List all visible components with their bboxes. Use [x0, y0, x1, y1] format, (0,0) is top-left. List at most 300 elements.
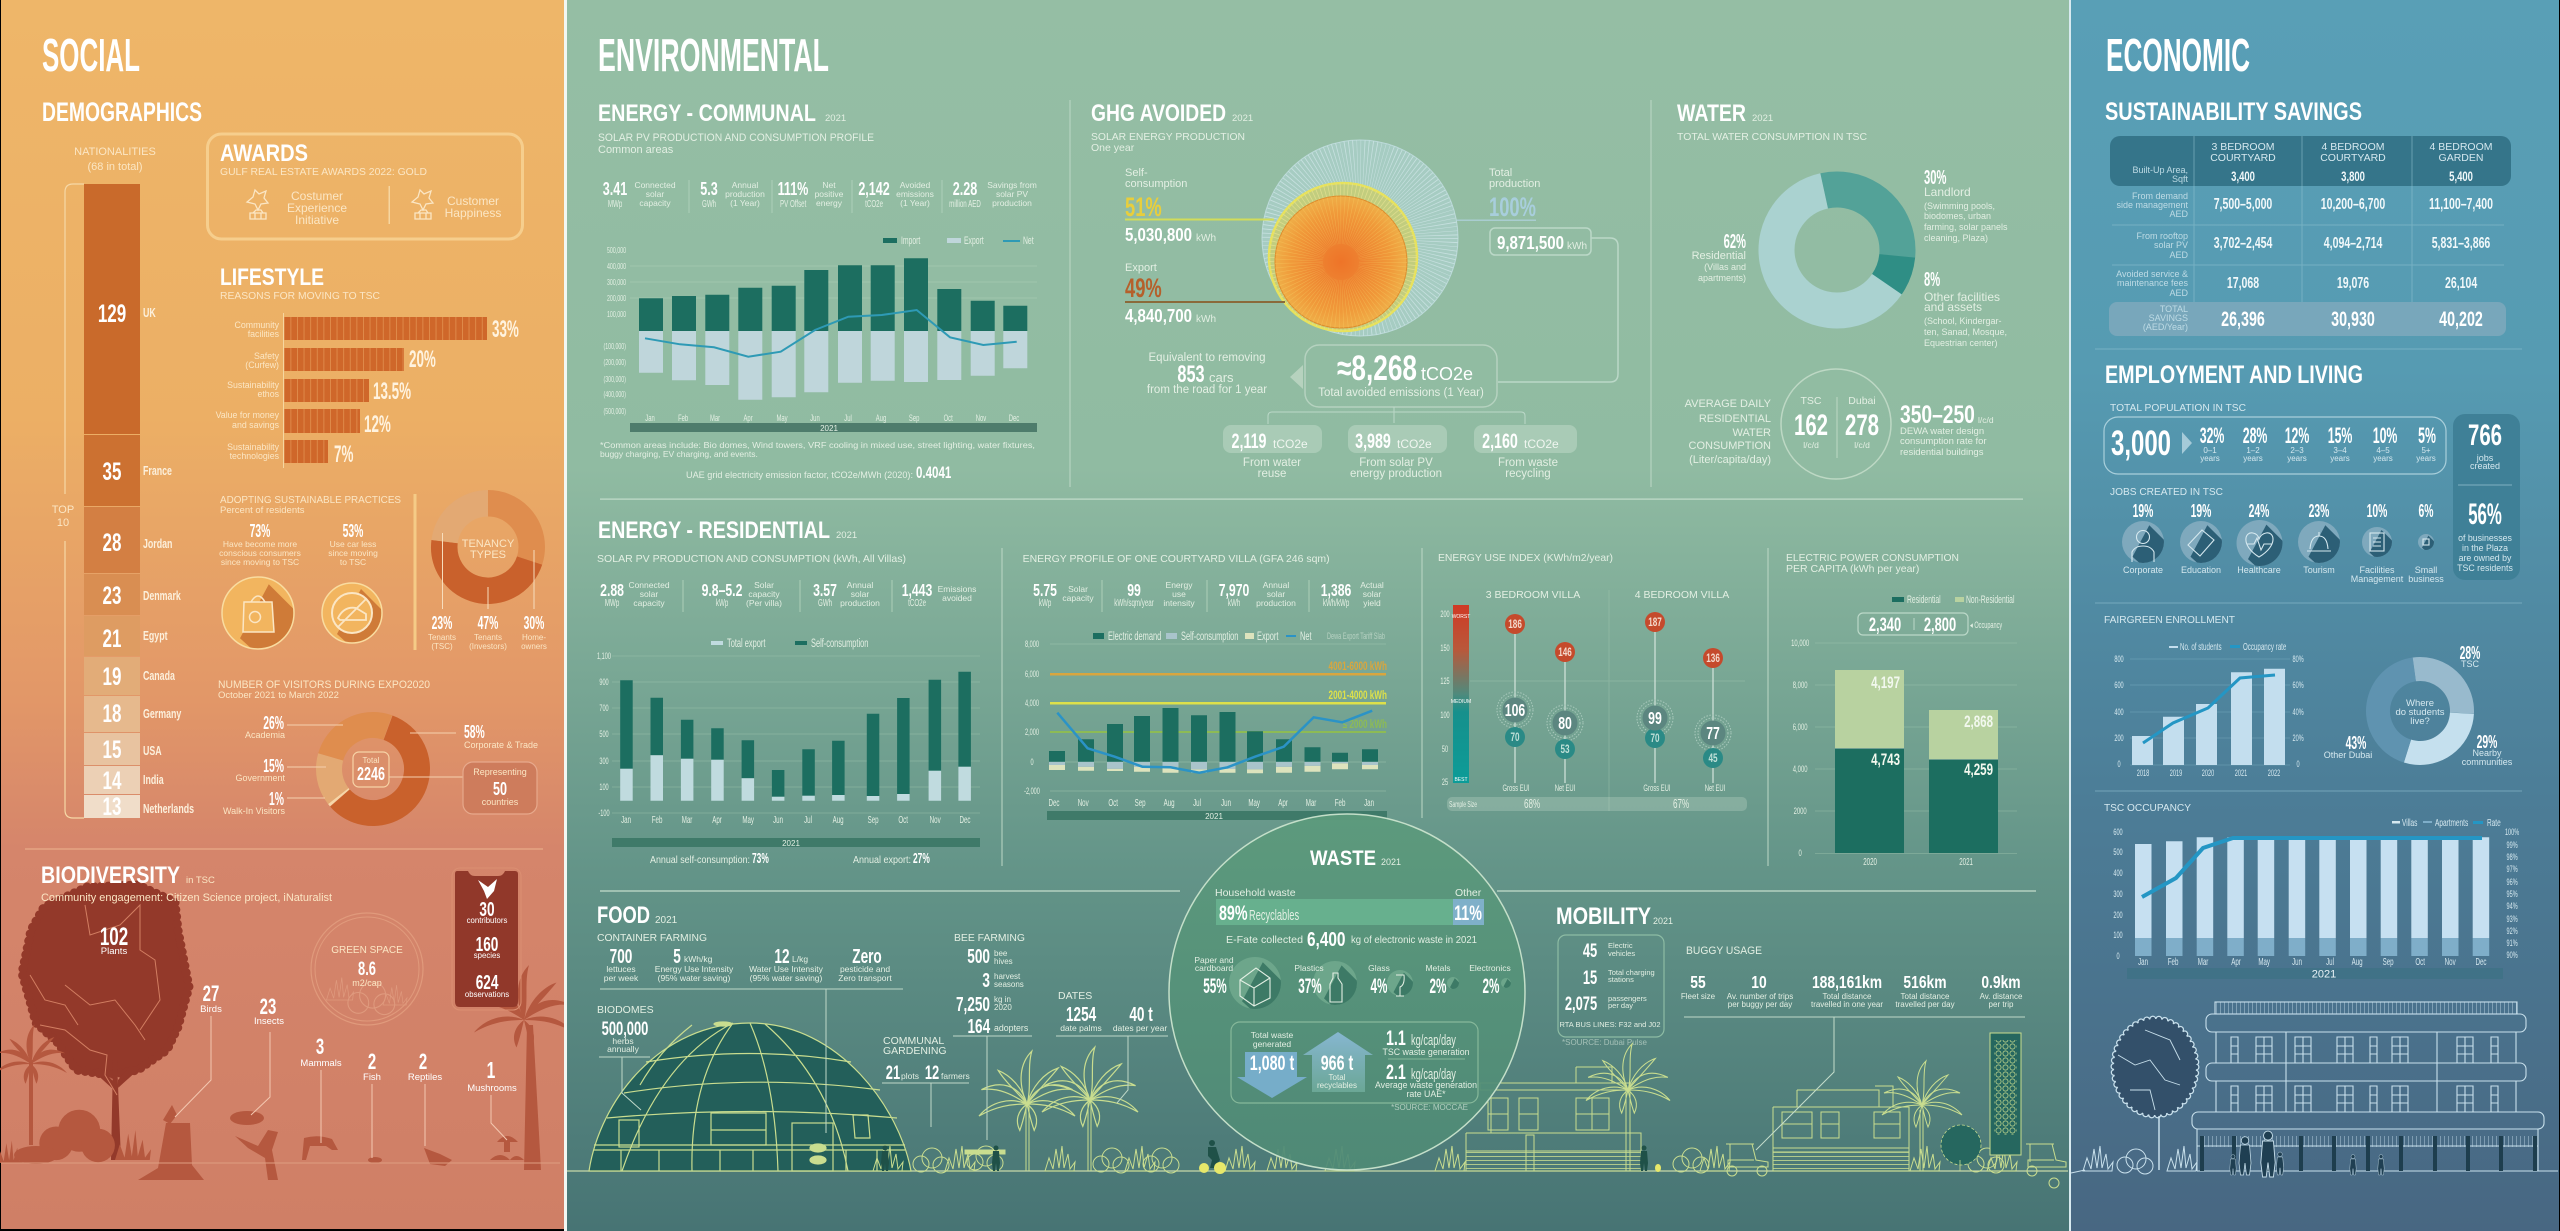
section: food: 2021	[655, 915, 678, 926]
panel: social	[0, 29, 574, 1180]
stats row: Avoided	[900, 180, 931, 190]
table: sustainability savings: 40,202	[2439, 307, 2483, 331]
donut chart: visitors during expo: countries	[482, 797, 519, 807]
species counts with leader lines: 2	[419, 1049, 427, 1074]
section: ghg avoided: Total	[1489, 167, 1512, 179]
buggy usage stats: travelled per day	[1895, 1000, 1955, 1009]
combo chart: villa energy: 2,000	[1025, 727, 1039, 737]
section: water: (School, Kindergar-	[1924, 316, 2002, 326]
arrow up	[1303, 1032, 1373, 1092]
combo chart: tsc occupancy: 200	[2113, 910, 2123, 920]
bar chart: communal import and export: Nov	[976, 413, 986, 423]
bar chart: communal import and export: Sep	[909, 413, 920, 423]
callout: total avoided emissions: Total avoided emissions (1 Year)	[1318, 387, 1484, 399]
card: jobs and businesses: TSC residents	[2457, 563, 2513, 573]
container farming stats: Water Use Intensity	[749, 964, 824, 974]
buggy usage stats: per trip	[1989, 1000, 2014, 1009]
combo chart: villa energy: Net	[1300, 630, 1312, 644]
combo chart: fairgreen enrollment: 2020	[2202, 768, 2214, 778]
block: adopting sustainable practices	[219, 494, 401, 674]
section: water: farming, solar panels	[1924, 222, 2008, 232]
bar chart: reasons for moving: Community	[235, 320, 280, 330]
heading: tsc occupancy: TSC OCCUPANCY	[2104, 802, 2191, 814]
panel: waste circle: E-Fate collected	[1226, 934, 1303, 946]
stats row: GWh	[702, 197, 716, 209]
chart: nationalities column: 10	[57, 517, 69, 529]
combo chart: villa energy: 6,000	[1025, 669, 1039, 679]
combo chart: villa energy: Mar	[1306, 796, 1317, 808]
callout: green space: m2/cap	[352, 978, 382, 988]
bar chart: communal import and export: 100,000	[607, 311, 626, 319]
chips: emissions sources: From solar PV	[1359, 457, 1433, 469]
table: sustainability savings: 3,400	[2231, 168, 2255, 185]
heading: courtyard villa: ENERGY PROFILE OF ONE COURTYARD VILLA (GFA 246 sqm)	[1023, 553, 1330, 565]
chart: energy use index: 70	[1511, 732, 1520, 745]
chart: energy use index: 25	[1442, 777, 1448, 787]
stats row villa: Energy	[1166, 580, 1193, 590]
bee farming stats: seasons	[994, 980, 1024, 989]
table: sustainability savings: (AED/Year)	[2143, 322, 2188, 332]
icon: buggy two	[2026, 1144, 2066, 1188]
stats row: Annual	[847, 580, 873, 590]
heading: lifestyle: REASONS FOR MOVING TO TSC	[220, 290, 380, 302]
table: sustainability savings: Avoided service &	[2116, 269, 2188, 279]
bee farming stats: hives	[994, 957, 1013, 966]
card: jobs and businesses	[2453, 414, 2520, 580]
combo chart: tsc occupancy: 300	[2113, 889, 2123, 899]
chart: electric power per capita: 4,743	[1871, 751, 1900, 770]
chart: energy use index: 77	[1706, 724, 1720, 744]
total production box	[1490, 228, 1591, 255]
chart: energy use index: 3 BEDROOM VILLA	[1486, 589, 1580, 601]
chart: electric power per capita: 4,259	[1964, 761, 1993, 780]
card: jobs and businesses: in the Plaza	[2462, 543, 2508, 553]
bee farming stats: 3	[982, 969, 990, 992]
section: water	[1677, 100, 2008, 479]
chart: electric power per capita: Residential	[1907, 593, 1941, 605]
panel: phone iNaturalist: 30	[479, 898, 495, 921]
card: jobs and businesses: 766	[2468, 419, 2502, 452]
table: sustainability savings: COURTYARD	[2320, 152, 2386, 164]
biodomes stats: 500,000	[602, 1019, 648, 1040]
stats row: million AED	[949, 197, 981, 209]
block: adopting sustainable practices: ADOPTING SUSTAINABLE PRACTICES	[220, 494, 401, 506]
title: economic: ECONOMIC	[2106, 29, 2250, 81]
heading: lifestyle	[220, 264, 380, 302]
section: water: 2021	[1752, 113, 1773, 124]
bar chart: all villas solar: Feb	[652, 813, 663, 825]
block: adopting sustainable practices: to TSC	[340, 557, 366, 567]
buggy usage stats: 516km	[1903, 972, 1947, 992]
table: sustainability savings: COURTYARD	[2210, 152, 2276, 164]
icon: mashrabiya tower	[1990, 1033, 2021, 1155]
bar chart: communal import and export: (100,000)	[603, 343, 626, 351]
combo chart: fairgreen enrollment: 2018	[2137, 768, 2149, 778]
panel: waste generated: 1.1	[1386, 1026, 1406, 1050]
panel: population tenure: 12%	[2285, 423, 2309, 448]
bee farming stats: bee	[994, 949, 1008, 958]
panel: waste generated	[1231, 1022, 1478, 1103]
container farming stats: 700	[610, 945, 632, 968]
donut chart: visitors during expo: NUMBER OF VISITORS DURING EXPO2020	[218, 679, 430, 691]
panel: waste circle: *SOURCE: MOCCAE	[1391, 1103, 1468, 1112]
combo chart: villa energy	[1024, 630, 1387, 821]
panel: population tenure: 2–3	[2290, 446, 2304, 455]
stats row: capacity	[639, 198, 671, 208]
table: sustainability savings: 19,076	[2337, 274, 2369, 292]
icon: mammal	[302, 1136, 338, 1160]
stats row villa: solar	[1363, 589, 1381, 599]
chart: energy use index: Gross EUI	[1643, 783, 1671, 793]
combo chart: villa energy: Export	[1257, 630, 1279, 644]
bar chart: all villas solar: 100	[599, 782, 609, 792]
bar chart: communal import and export: 2021	[820, 424, 838, 433]
species counts with leader lines: Reptiles	[408, 1072, 442, 1083]
bar chart: all villas solar: 73%	[752, 849, 769, 867]
table: sustainability savings: TOTAL	[2160, 304, 2188, 314]
section: ghg avoided: GHG AVOIDED	[1091, 100, 1226, 127]
section: water: and assets	[1924, 300, 1982, 314]
panel: waste generated: kg/cap/day	[1411, 1032, 1457, 1049]
section: mobility: MOBILITY	[1556, 903, 1651, 930]
chips: emissions sources: tCO2e	[1273, 437, 1308, 451]
job sector icons: Tourism	[2303, 565, 2335, 575]
sun diagram	[1262, 140, 1458, 336]
heading: fairgreen enrollment: FAIRGREEN ENROLLMENT	[2104, 614, 2236, 626]
section: water: 30%	[1924, 167, 1946, 189]
stats row: solar PV	[996, 189, 1028, 199]
waste composition icons: Metals	[1425, 963, 1451, 973]
leader line from buggy usage	[1756, 1017, 1834, 1150]
section: water: Equestrian center)	[1924, 338, 1998, 348]
bar chart: all villas solar	[597, 637, 980, 867]
chart: electric power per capita: 6,000	[1793, 722, 1808, 732]
block: adopting sustainable practices: since moving to TSC	[221, 557, 299, 567]
bee farming stats	[953, 932, 1032, 1140]
combo chart: villa energy: -2,000	[1024, 786, 1040, 796]
donut chart: visitors during expo: October 2021 to March 2022	[218, 690, 339, 701]
container farming stats: (95% water saving)	[750, 973, 823, 983]
panel: population tenure: years	[2373, 454, 2393, 463]
stats row: capacity	[748, 589, 780, 599]
chart: energy use index: 99	[1648, 709, 1662, 729]
donut chart: where do students live	[2324, 643, 2513, 767]
combo chart: tsc occupancy: Dec	[2475, 955, 2487, 967]
combo chart: villa energy: 4,000	[1025, 698, 1039, 708]
combo chart: villa energy: Self-consumption	[1181, 630, 1238, 644]
donut chart: tenancy types: Tenants	[428, 633, 456, 642]
stats row villa: Solar	[1068, 584, 1088, 594]
section: ghg avoided: One year	[1091, 142, 1135, 154]
combo chart: villa energy: Dewa Export Tariff Slab	[1327, 631, 1385, 641]
buggy usage stats: 10	[1751, 972, 1767, 992]
combo chart: tsc occupancy: 2021	[2312, 968, 2336, 980]
card: jobs and businesses: jobs	[2476, 453, 2494, 463]
footnote: 0.4041	[916, 464, 951, 483]
table: sustainability savings: 4 BEDROOM	[2429, 141, 2493, 153]
waste composition icons: 37%	[1298, 974, 1322, 998]
stats row: solar	[851, 589, 869, 599]
biodomes stats: BIODOMES	[597, 1004, 654, 1016]
donut chart: where do students live: do students	[2395, 707, 2445, 718]
bar chart: communal import and export: Apr	[744, 413, 753, 423]
bar chart: reasons for moving: Sustainability	[227, 380, 280, 390]
section: energy communal: 2021	[825, 113, 846, 124]
combo chart: fairgreen enrollment: Occupancy rate	[2243, 640, 2287, 652]
bar chart: communal import and export: Aug	[876, 413, 886, 423]
panel: phone iNaturalist: 624	[476, 971, 499, 994]
bar chart: all villas solar: -100	[598, 808, 610, 818]
icon: large palm	[474, 965, 574, 1170]
table: sustainability savings: AED	[2169, 288, 2188, 298]
section: ghg avoided: 100%	[1489, 191, 1536, 222]
combo chart: tsc occupancy: Oct	[2415, 955, 2425, 967]
donut chart: tenancy types: 23%	[432, 613, 452, 634]
donut chart: tenancy types: 47%	[478, 613, 498, 634]
card: jobs and businesses: 56%	[2468, 498, 2502, 531]
panel: population tenure: years	[2287, 454, 2307, 463]
stats row: 1,443	[902, 581, 932, 601]
panel: population tenure: 0–1	[2203, 446, 2217, 455]
donut chart: visitors during expo: 1%	[269, 789, 284, 810]
stats row villa	[1033, 580, 1384, 612]
panel: population tenure: years	[2243, 454, 2263, 463]
dates stats: 40 t	[1129, 1003, 1153, 1026]
chart: energy use index: Gross EUI	[1502, 783, 1530, 793]
bar chart: communal import and export: Export	[964, 234, 984, 246]
job sector icons: 10%	[2367, 501, 2387, 522]
species counts with leader lines: Insects	[254, 1016, 284, 1027]
stats row villa: 99	[1127, 581, 1141, 601]
combo chart: fairgreen enrollment: 0	[2296, 759, 2300, 769]
planting	[2071, 1146, 2197, 1174]
table: sustainability savings: 5,831–3,866	[2432, 234, 2490, 252]
combo chart: fairgreen enrollment: 2022	[2268, 768, 2280, 778]
section: water: AVERAGE DAILY	[1685, 398, 1772, 410]
chart: energy use index: 150	[1440, 643, 1450, 653]
combo chart: villa energy: Nov	[1078, 796, 1089, 808]
stats row villa: 5.75	[1033, 581, 1057, 601]
panel: waste generated: 966 t	[1321, 1051, 1353, 1075]
bar chart: all villas solar: 300	[599, 756, 609, 766]
waste composition icons	[1194, 955, 1514, 1027]
total production box: kWh	[1567, 241, 1587, 252]
section: ghg avoided: kWh	[1196, 233, 1216, 244]
donut chart: where do students live: Where	[2406, 698, 2434, 709]
job sector icons: Small	[2415, 565, 2437, 575]
panel: mobility stats: per day	[1608, 1001, 1633, 1010]
waste composition icons: cardboard	[1195, 963, 1233, 973]
combo chart: villa energy: Dec	[1048, 796, 1060, 808]
stats row: positive	[815, 189, 844, 199]
job sector icons: Management	[2351, 574, 2404, 584]
donut chart: visitors during expo: 50	[493, 780, 507, 800]
combo chart: tsc occupancy: 0	[2116, 951, 2120, 961]
chart: electric power per capita: 2,340	[1869, 615, 1901, 636]
table: sustainability savings: solar PV	[2154, 240, 2188, 250]
bar chart: reasons for moving: technologies	[230, 451, 280, 461]
donut chart: where do students live: 29%	[2477, 732, 2497, 753]
communal gardening stats: GARDENING	[883, 1045, 947, 1057]
icon: date palms	[979, 1047, 1138, 1171]
donut chart: visitors during expo: 58%	[464, 722, 485, 743]
chart: nationalities column: Germany	[143, 707, 182, 722]
panel: mobility stats: 45	[1583, 941, 1597, 962]
donut chart: where do students live: 43%	[2346, 733, 2366, 754]
bee farming stats: BEE FARMING	[954, 932, 1025, 944]
panel: mobility stats	[1558, 935, 1664, 1037]
stats row: tCO2e	[908, 596, 926, 608]
chart: electric power per capita: 0	[1799, 848, 1802, 858]
species counts with leader lines: 23	[260, 994, 276, 1019]
species counts with leader lines: Mushrooms	[467, 1083, 517, 1094]
table: sustainability savings: From demand	[2132, 191, 2188, 201]
combo chart: tsc occupancy: 95%	[2507, 889, 2518, 899]
stats row villa: capacity	[1062, 593, 1094, 603]
heading: biodiversity: in TSC	[186, 875, 215, 886]
container farming stats: lettuces	[606, 964, 636, 974]
stats row: GWh	[818, 596, 832, 608]
stats row: 2,142	[858, 180, 890, 200]
chart: energy use index: ENERGY USE INDEX (KWh/m2/year)	[1438, 552, 1613, 564]
job sector icons: 6%	[2419, 501, 2433, 522]
buggy usage stats: Fleet size	[1681, 992, 1716, 1001]
section: ghg avoided: Export	[1125, 262, 1157, 274]
panel: mobility stats: passengers	[1608, 994, 1647, 1003]
donut chart: where do students live: 28%	[2460, 643, 2480, 664]
bar chart: all villas solar: Annual export:	[853, 855, 911, 866]
bar chart: reasons for moving: 12%	[364, 411, 391, 438]
footnote: buggy charging, EV charging, and events.	[600, 449, 758, 459]
bar chart: all villas solar: 1,100	[597, 651, 611, 661]
combo chart: fairgreen enrollment: 0	[2117, 759, 2121, 769]
bar chart: communal import and export: (200,000)	[603, 359, 626, 367]
section: water: 350–250	[1900, 401, 1975, 429]
bar chart: all villas solar: Sep	[868, 813, 879, 825]
combo chart: tsc occupancy: Mar	[2198, 955, 2209, 967]
job sector icons: Healthcare	[2237, 565, 2281, 575]
section: food	[597, 902, 1168, 1140]
total production box: 9,871,500	[1497, 233, 1564, 253]
heading: employment and living: EMPLOYMENT AND LIVING	[2105, 361, 2363, 389]
chart: energy use index: 70	[1651, 733, 1660, 746]
bar chart: reasons for moving: 13.5%	[373, 378, 411, 405]
stats row villa: Actual	[1360, 580, 1384, 590]
chart: energy use index: 80	[1558, 714, 1572, 734]
section: water: consumption rate for	[1900, 436, 1987, 447]
table: sustainability savings: From rooftop	[2136, 231, 2188, 241]
donut chart: visitors during expo: 15%	[263, 756, 284, 777]
donut chart: tenancy types: owners	[521, 642, 547, 651]
stats row villa: Annual	[1263, 580, 1289, 590]
combo chart: tsc occupancy: 91%	[2507, 938, 2518, 948]
stats row: Emissions	[938, 584, 976, 594]
combo chart: villa energy: ≤ 2000 kWh	[1343, 719, 1387, 732]
block: adopting sustainable practices: conscious consumers	[219, 548, 301, 558]
icon: no car	[322, 583, 397, 664]
heading: biodiversity	[41, 862, 332, 904]
panel: environmental	[567, 29, 2558, 1188]
combo chart: tsc occupancy: Sep	[2383, 955, 2394, 967]
stats row villa: kWp	[1039, 596, 1052, 608]
waste composition icons: Plastics	[1294, 963, 1324, 973]
table: sustainability savings: 3,800	[2341, 168, 2365, 185]
table: sustainability savings: AED	[2169, 250, 2188, 260]
panel: population tenure	[2104, 417, 2446, 474]
table: sustainability savings: SAVINGS	[2149, 313, 2188, 323]
combo chart: villa energy: 0	[1030, 757, 1034, 767]
chart: electric power per capita: PER CAPITA (kWh per year)	[1786, 563, 1919, 575]
callout: green space: GREEN SPACE	[331, 945, 403, 956]
species counts with leader lines: Mammals	[300, 1058, 342, 1069]
chart: energy use index: 125	[1440, 676, 1450, 686]
bar chart: all villas solar: 900	[599, 677, 609, 687]
job sector icons: 19%	[2191, 501, 2211, 522]
section: mobility: BUGGY USAGE	[1686, 945, 1762, 957]
circle: TSC vs Dubai water: 278	[1845, 409, 1879, 442]
table: sustainability savings: 3,702–2,454	[2214, 234, 2273, 252]
communal gardening stats: farmers	[941, 1071, 970, 1081]
panel: awards: AWARDS	[220, 140, 308, 167]
heading: total population: TOTAL POPULATION IN TSC	[2110, 402, 2246, 414]
container farming stats: pesticide and	[840, 964, 890, 974]
combo chart: tsc occupancy: Apr	[2231, 955, 2241, 967]
bar chart: reasons for moving: (Curfew)	[245, 360, 279, 370]
bee farming stats: 164	[967, 1015, 991, 1038]
section: water: WATER	[1677, 100, 1746, 127]
species counts with leader lines: 1	[487, 1058, 495, 1084]
bar chart: communal import and export: Import	[901, 234, 921, 246]
bar chart: all villas solar: Jun	[773, 813, 783, 825]
donut chart: tenancy types	[428, 492, 547, 651]
panel: population tenure: 3–4	[2333, 446, 2347, 455]
section: water: cleaning, Plaza)	[1924, 233, 1988, 243]
bar chart: all villas solar: 27%	[913, 849, 930, 867]
bar chart: communal import and export: 500,000	[607, 247, 626, 255]
chart: nationalities column: Netherlands	[143, 802, 194, 817]
buggy usage stats: per buggy per day	[1728, 1000, 1792, 1009]
section: water: l/c/d	[1978, 415, 1994, 425]
buggy usage stats: 188,161km	[1812, 972, 1882, 992]
bar chart: communal import and export: (400,000)	[603, 391, 626, 399]
panel: waste generated: rate UAE*	[1406, 1089, 1446, 1099]
bar chart: all villas solar: Mar	[682, 813, 693, 825]
panel: awards: Happiness	[445, 206, 501, 220]
chart: electric power per capita	[1786, 552, 2017, 867]
panel: economic	[2071, 29, 2558, 1177]
icon: buggy	[1726, 1144, 1768, 1176]
stats row villa: kWh/kWp	[1323, 596, 1350, 608]
stats row: tCO2e	[865, 197, 883, 209]
combo chart: tsc occupancy: Jun	[2292, 955, 2302, 967]
bar chart: communal import and export: Oct	[944, 413, 953, 423]
stats row: Solar	[754, 580, 774, 590]
building columns	[2200, 1136, 2537, 1171]
illustration: ground, dome, palms and villas	[567, 1017, 2068, 1188]
bee farming stats: kg in	[994, 995, 1011, 1004]
buggy usage stats: Total distance	[1823, 992, 1872, 1001]
chart: electric power per capita: 2,800	[1924, 615, 1956, 636]
section: ghg avoided: production	[1489, 178, 1540, 190]
communal gardening stats: 12	[925, 1063, 939, 1084]
waste composition icons: Glass	[1368, 963, 1390, 973]
combo chart: tsc occupancy: Nov	[2445, 955, 2456, 967]
communal gardening stats: plots	[901, 1071, 919, 1081]
donut chart: visitors during expo: Academia	[245, 730, 285, 740]
species counts with leader lines: 27	[203, 981, 219, 1006]
section: energy residential: SOLAR PV PRODUCTION AND CONSUMPTION (kWh, All Villas)	[597, 553, 906, 565]
chart: nationalities column: TOP	[52, 504, 74, 516]
